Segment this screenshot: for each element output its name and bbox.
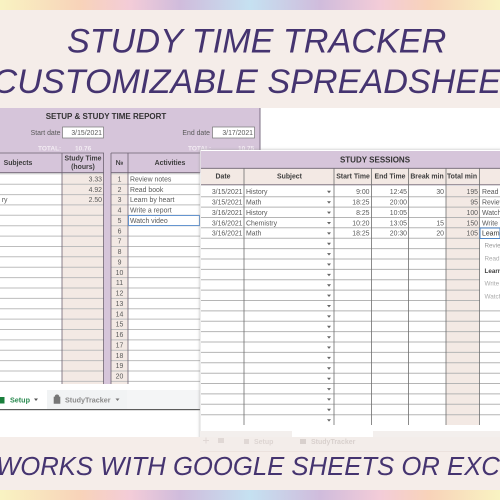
row numbers: 6: [118, 228, 122, 235]
totals: [38, 146, 255, 152]
title: [0, 22, 500, 101]
dropdown menu with activities: [480, 228, 500, 304]
report header band: [0, 108, 260, 173]
bottom strip: [0, 437, 500, 490]
sheet tabs: setup and study tracker: Setup: [10, 396, 31, 404]
faded sheet tabs: StudyTracker: [311, 439, 356, 446]
session rows: 10:05: [390, 210, 407, 217]
session rows: History: [246, 189, 268, 196]
session rows: 8:25: [356, 210, 370, 217]
sheet shadow: [199, 149, 500, 439]
session rows: 18:25: [352, 231, 370, 238]
session rows: 3/16/2021: [212, 210, 243, 217]
session rows: 150: [466, 220, 478, 227]
session rows: 30: [436, 189, 444, 196]
subject and hours values: ry: [2, 197, 8, 204]
session rows: 20:30: [390, 231, 407, 238]
subject and hours values: 3.33: [89, 176, 102, 183]
icon: setup lock: [0, 397, 4, 404]
session rows: 100: [466, 210, 478, 217]
sessions header row: Start Time: [336, 174, 370, 180]
row numbers: 20: [116, 374, 123, 381]
title: STUDY TIME TRACKER: [67, 22, 446, 60]
sheet tabs: setup and study tracker: [0, 390, 200, 410]
faded sheet tabs: Setup: [254, 439, 273, 446]
activities list: Watch video: [130, 218, 168, 225]
session rows: 3/16/2021: [212, 231, 243, 238]
sessions header row: [201, 168, 500, 185]
activities list: Write a report: [130, 208, 172, 214]
row numbers: 5: [118, 218, 122, 225]
top rainbow band: [0, 0, 500, 10]
table header cells: (hours): [71, 164, 95, 171]
totals: 10.76: [75, 146, 92, 152]
session rows: 13:05: [390, 220, 407, 227]
row numbers: 16: [116, 332, 123, 339]
table header cells: Study Time: [64, 156, 102, 162]
row numbers: [116, 176, 123, 381]
session rows: 9:00: [356, 189, 370, 196]
session rows: Math: [246, 231, 261, 238]
dropdown arrows: [327, 191, 331, 422]
row numbers: 19: [116, 363, 123, 370]
row numbers: 17: [116, 342, 123, 350]
panel: setup and study time report sheet: [0, 108, 260, 410]
row numbers: 1: [118, 176, 122, 183]
totals: 10.75: [238, 146, 255, 152]
table header cells: Subjects: [4, 160, 33, 167]
end date field: End date: [182, 130, 210, 137]
row numbers: 13: [116, 301, 123, 308]
totals: TOTAL:: [38, 146, 61, 152]
row numbers: 12: [116, 291, 123, 298]
session rows: Math: [246, 200, 261, 207]
subject and hours values: [2, 176, 102, 204]
subject and hours values: 4.92: [89, 187, 102, 194]
start date field: [31, 127, 104, 138]
row numbers: 9: [118, 259, 122, 266]
start date field: Start date: [31, 130, 61, 137]
sessions title band: STUDY SESSIONS: [340, 156, 411, 164]
row numbers: 3: [118, 197, 122, 204]
row numbers: 10: [116, 270, 123, 277]
sessions header row: Total min: [447, 174, 477, 180]
bottom rainbow band: [0, 490, 500, 500]
sessions header row: End Time: [375, 174, 406, 180]
session rows: 18:25: [352, 200, 370, 207]
session rows: 3/16/2021: [212, 220, 243, 227]
totals: TOTAL:: [188, 146, 211, 152]
sessions table grid: [201, 168, 500, 425]
session rows: 105: [466, 231, 478, 238]
faded sheet tabs: [200, 431, 500, 452]
start date field: 3/15/2021: [71, 130, 102, 137]
row numbers: 15: [116, 322, 123, 329]
report title: SETUP & STUDY TIME REPORT: [46, 112, 166, 121]
row numbers: 11: [116, 280, 123, 287]
activities list: Read book: [130, 187, 164, 194]
session rows: 15: [436, 220, 444, 227]
session rows: 95: [470, 200, 478, 207]
icon: study tracker lock: [54, 395, 60, 404]
sheet tabs: setup and study tracker: StudyTracker: [65, 396, 111, 404]
session rows: 20: [436, 231, 444, 238]
activities list: [128, 176, 200, 226]
end date field: [182, 127, 254, 138]
session rows: Chemistry: [246, 220, 278, 227]
activities list: Learn by heart: [130, 197, 175, 204]
subject and hours values: 2.50: [89, 197, 102, 204]
white spreadsheet area: [0, 108, 500, 437]
panel: study sessions sheet: [199, 149, 500, 439]
row numbers: 14: [116, 311, 123, 318]
session rows: [212, 189, 500, 238]
sessions header row: Subject: [277, 174, 303, 180]
end date field: 3/17/2021: [222, 130, 253, 137]
row numbers: 7: [118, 239, 122, 246]
row numbers: 4: [118, 208, 122, 214]
session rows: 195: [466, 189, 478, 196]
table body: [0, 153, 200, 384]
session rows: History: [246, 210, 268, 217]
session rows: 10:20: [352, 220, 370, 227]
table header cells: Activities: [155, 160, 185, 167]
activities list: Review notes: [130, 176, 172, 183]
session rows: 20:00: [390, 200, 407, 207]
table header cells: [0, 153, 200, 173]
table header cells: №: [116, 160, 124, 167]
sessions title band: [201, 151, 500, 168]
row numbers: 8: [118, 249, 122, 256]
session rows: 12:45: [390, 189, 407, 196]
sessions header row: Date: [216, 174, 231, 180]
session rows: 3/15/2021: [212, 189, 243, 196]
session rows: 3/15/2021: [212, 200, 243, 207]
row numbers: 2: [118, 187, 122, 194]
sessions header row: Break min: [410, 174, 444, 180]
row numbers: 18: [116, 353, 123, 360]
